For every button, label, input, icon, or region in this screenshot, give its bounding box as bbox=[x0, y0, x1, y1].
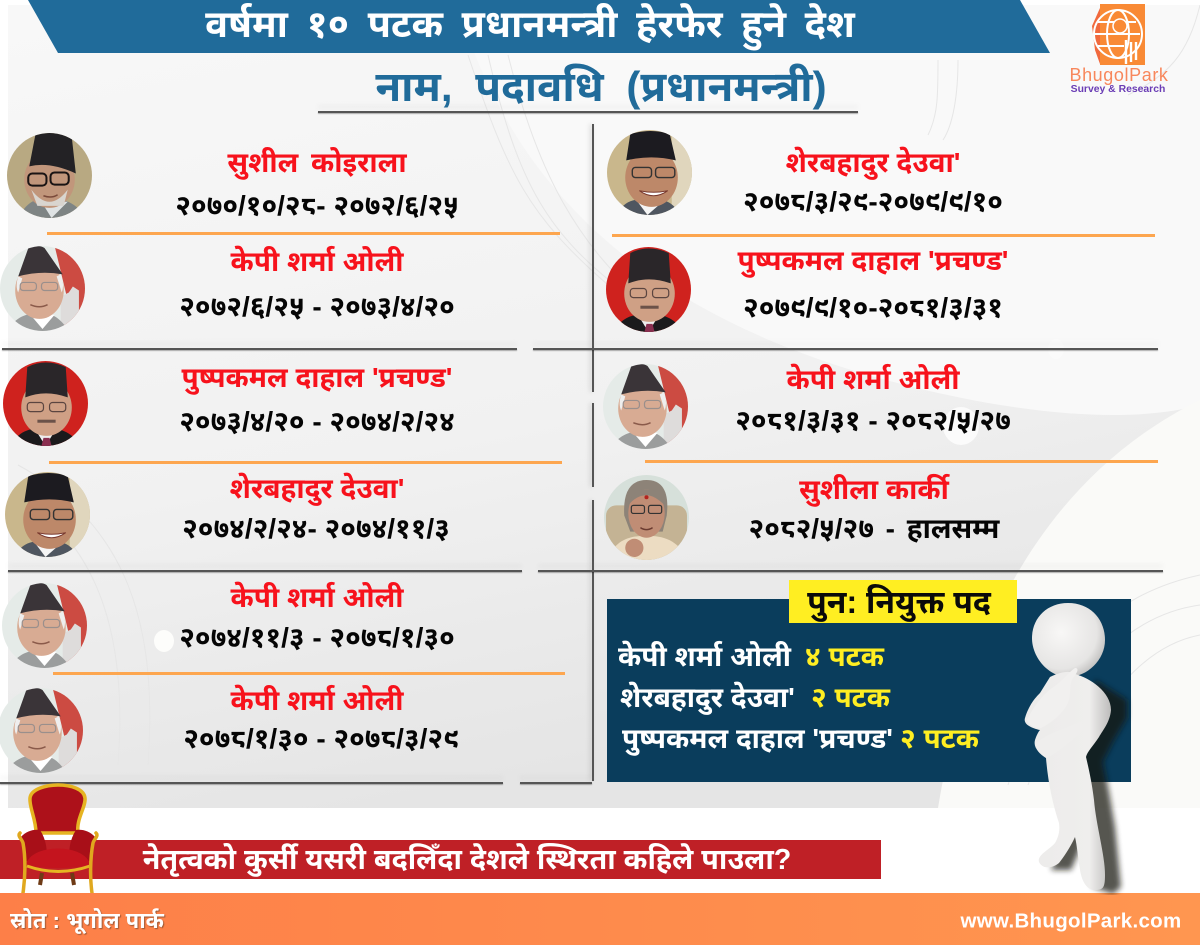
text row: KP Oli 4 times: ४ पटक bbox=[805, 641, 884, 672]
portrait: KP Oli bbox=[603, 364, 688, 449]
entry: Sushila Karki: सुशीला कार्की bbox=[799, 474, 949, 505]
logo: BhugolPark: BhugolPark bbox=[1069, 65, 1169, 85]
entry: Pushpa Kamal Dahal 2: पुष्पकमल दाहाल 'प्रचण्ड' bbox=[738, 245, 1008, 276]
banner: closing question bbox=[0, 840, 881, 879]
entry: Pushpa Kamal Dahal 2 bbox=[606, 245, 1008, 332]
entry: Sushila Karki bbox=[604, 474, 1000, 560]
entry: KP Sharma Oli 3 bbox=[0, 684, 459, 773]
title banner: वर्षमा १० पटक प्रधानमन्त्री हेरफेर हुने देश bbox=[205, 4, 855, 46]
entry: KP Sharma Oli 2: केपी शर्मा ओली bbox=[231, 582, 403, 613]
portrait: KP Oli bbox=[2, 583, 87, 668]
logo: BhugolPark: Survey & Research bbox=[1071, 84, 1165, 95]
entry: KP Sharma Oli 2 bbox=[2, 582, 455, 668]
text row: Deuba 2 times bbox=[620, 682, 890, 715]
portrait: Deuba bbox=[5, 472, 90, 557]
figure head bbox=[1032, 603, 1105, 677]
portrait: KP Oli bbox=[0, 688, 83, 773]
icon: globe logo bbox=[1092, 4, 1145, 65]
portrait: KP Oli bbox=[0, 246, 85, 331]
entry: KP Sharma Oli 4 bbox=[603, 364, 1011, 449]
text row: Prachanda 2 times: २ पटक bbox=[900, 723, 979, 754]
entry: Sushil Koirala bbox=[7, 133, 459, 221]
title banner bbox=[28, 0, 1050, 53]
text row: Prachanda 2 times: पुष्पकमल दाहाल 'प्रचण्ड' bbox=[622, 723, 893, 754]
portrait: Prachanda bbox=[606, 247, 691, 332]
entry: Sher Bahadur Deuba 1: २०७४/२/२४- २०७४/११/३ bbox=[182, 513, 450, 544]
footer bar bbox=[0, 893, 1200, 945]
entry: Pushpa Kamal Dahal 1: २०७३/४/२० - २०७४/२/२४ bbox=[179, 406, 455, 437]
icon: thinking 3D figure bbox=[1024, 603, 1132, 895]
entry: Pushpa Kamal Dahal 2: २०७९/९/१०-२०८१/३/३१ bbox=[743, 292, 1003, 323]
website: www.BhugolPark.com bbox=[960, 910, 1182, 933]
entry: KP Sharma Oli 2: २०७४/११/३ - २०७८/१/३० bbox=[179, 622, 455, 653]
portrait: Prachanda bbox=[3, 361, 88, 446]
entry: Sher Bahadur Deuba 2: २०७८/३/२९-२०७९/९/१० bbox=[743, 186, 1003, 217]
entry: KP Sharma Oli 1 bbox=[0, 246, 455, 331]
entry: Pushpa Kamal Dahal 1: पुष्पकमल दाहाल 'प्रचण्ड' bbox=[182, 362, 452, 393]
panel: reappointment box bbox=[607, 599, 1131, 782]
logo: BhugolPark bbox=[1069, 4, 1169, 95]
figure body bbox=[1025, 672, 1111, 890]
heading: reappointed posts bbox=[789, 580, 1017, 623]
portrait: Deuba bbox=[607, 130, 692, 215]
portrait: Sushil Koirala bbox=[7, 133, 92, 218]
entry: KP Sharma Oli 4: २०८१/३/३१ - २०८२/५/२७ bbox=[735, 405, 1011, 436]
text row: KP Oli 4 times bbox=[618, 640, 884, 672]
entry: KP Sharma Oli 1: केपी शर्मा ओली bbox=[231, 246, 403, 277]
figure shadow bbox=[1051, 680, 1127, 894]
text row: Deuba 2 times: शेरबहादुर देउवा' bbox=[620, 682, 795, 713]
entry: Sher Bahadur Deuba 1 bbox=[5, 472, 450, 557]
subtitle heading: नाम, पदावधि (प्रधानमन्त्री) bbox=[375, 63, 827, 110]
entry: Pushpa Kamal Dahal 1 bbox=[3, 361, 455, 446]
portrait: Sushila Karki bbox=[604, 475, 689, 560]
banner: closing question: नेतृत्वको कुर्सी यसरी बदलिँदा देशले स्थिरता कहिले पाउला? bbox=[143, 844, 791, 876]
entry: KP Sharma Oli 3: केपी शर्मा ओली bbox=[231, 685, 403, 716]
source text: स्रोत : भूगोल पार्क bbox=[10, 908, 164, 933]
entry: Sushila Karki: २०८२/५/२७ - हालसम्म bbox=[749, 513, 999, 544]
entry: Sushil Koirala: सुशील कोइराला bbox=[227, 147, 407, 178]
entry: Sher Bahadur Deuba 1: शेरबहादुर देउवा' bbox=[230, 473, 404, 504]
figure arm bbox=[1027, 668, 1077, 728]
text row: Deuba 2 times: २ पटक bbox=[811, 682, 890, 713]
entry: KP Sharma Oli 4: केपी शर्मा ओली bbox=[787, 364, 959, 395]
heading: reappointed posts: पुन: नियुक्त पद bbox=[807, 584, 991, 620]
text row: KP Oli 4 times: केपी शर्मा ओली bbox=[618, 641, 791, 672]
icon: red throne chair bbox=[17, 783, 99, 893]
entry: Sher Bahadur Deuba 2 bbox=[607, 130, 1003, 217]
entry: Sher Bahadur Deuba 2: शेरबहादुर देउवा' bbox=[786, 147, 960, 178]
entry: KP Sharma Oli 1: २०७२/६/२५ - २०७३/४/२० bbox=[179, 291, 455, 322]
entry: Sushil Koirala: २०७०/१०/२८- २०७२/६/२५ bbox=[175, 190, 459, 221]
entry: KP Sharma Oli 3: २०७८/१/३० - २०७८/३/२९ bbox=[183, 723, 459, 754]
